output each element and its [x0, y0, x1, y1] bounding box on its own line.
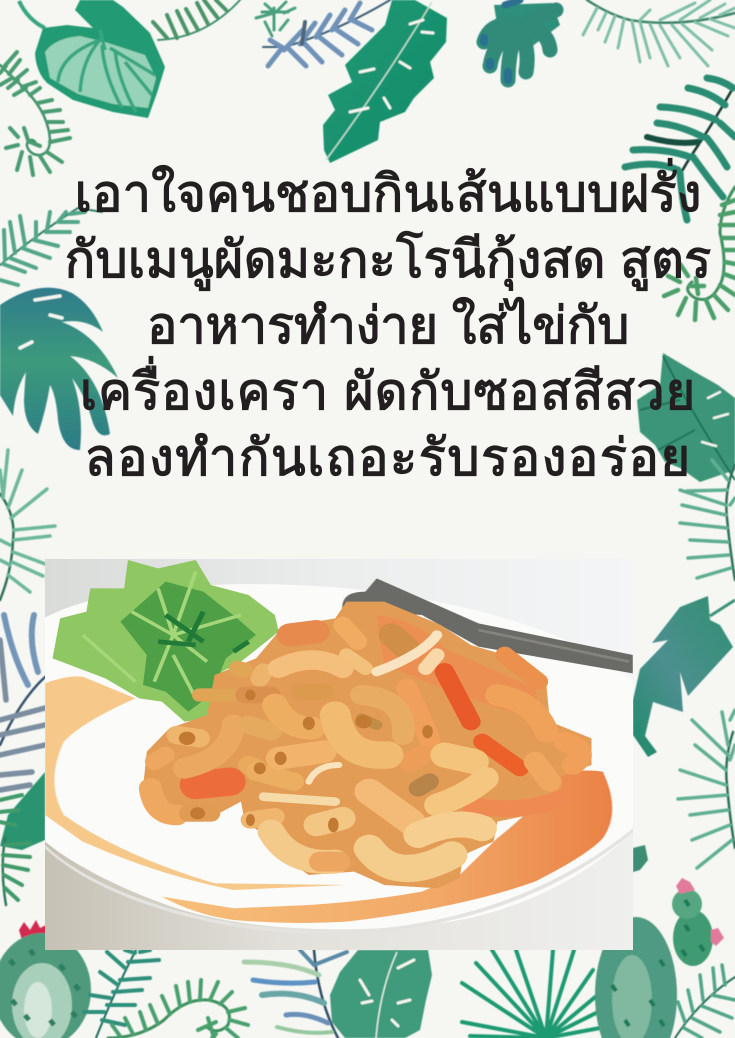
leaf: bottom monstera [330, 950, 432, 1038]
fork [342, 578, 633, 673]
leaf: bottom blue fern [244, 950, 347, 1038]
leaf: left bottom [0, 772, 45, 850]
leaf: small green bud [633, 845, 648, 872]
leaf: left monstera [0, 288, 118, 450]
leaf: monstera center top [323, 0, 447, 163]
leaf: bottom right fern [675, 965, 735, 1038]
title: เอาใจคนชอบกินเส้นแบบฝรั่ง [74, 165, 702, 222]
cactus: right [595, 878, 724, 1038]
leaf: left fern [0, 208, 102, 285]
leaf: blue left fern [0, 615, 45, 790]
title [65, 158, 711, 486]
leaf: left bottom fern [0, 795, 30, 905]
leaf: right palm [625, 78, 735, 220]
plate [41, 584, 637, 934]
leaf: right blue monstera [633, 596, 735, 757]
leaf: curled fern left [0, 52, 70, 175]
leaf: top fern [153, 0, 240, 40]
leaf: right monstera [637, 353, 735, 482]
leaf: blue fern [263, 0, 390, 66]
title: ลองทำกันเถอะรับรองอร่อย [84, 429, 692, 486]
macaroni pile [143, 602, 592, 888]
pasta tube openings [179, 690, 433, 832]
leaf: right fern curl [664, 187, 735, 320]
leaf: small top sprig [256, 2, 295, 36]
leaf: monstera top right [484, 0, 560, 80]
leaf: right lower fern [680, 460, 735, 580]
sauce and back pasta [290, 632, 316, 635]
title: อาหารทำง่าย ใส่ไข่กับ [147, 297, 629, 354]
leaf: top left heart [19, 0, 165, 118]
title: กับเมนูผัดมะกะโรนีกุ้งสด สูตร [65, 231, 711, 288]
leaf: bottom fern 1 [84, 950, 159, 1038]
leaf: bottom curled fern [108, 980, 248, 1038]
photo: macaroni plate [41, 559, 637, 950]
title: เครื่องเครา ผัดกับซอสสีสวย [80, 363, 696, 420]
cactus: left bottom [0, 920, 91, 1038]
leaf: left lower fern [0, 450, 55, 600]
leaf: top right fern [583, 0, 735, 66]
lettuce [53, 560, 279, 722]
leaf: right bottom fern [678, 710, 735, 868]
leaf: bottom palm [462, 950, 616, 1038]
plate rim paint [45, 676, 612, 923]
tabletop background [45, 559, 422, 618]
